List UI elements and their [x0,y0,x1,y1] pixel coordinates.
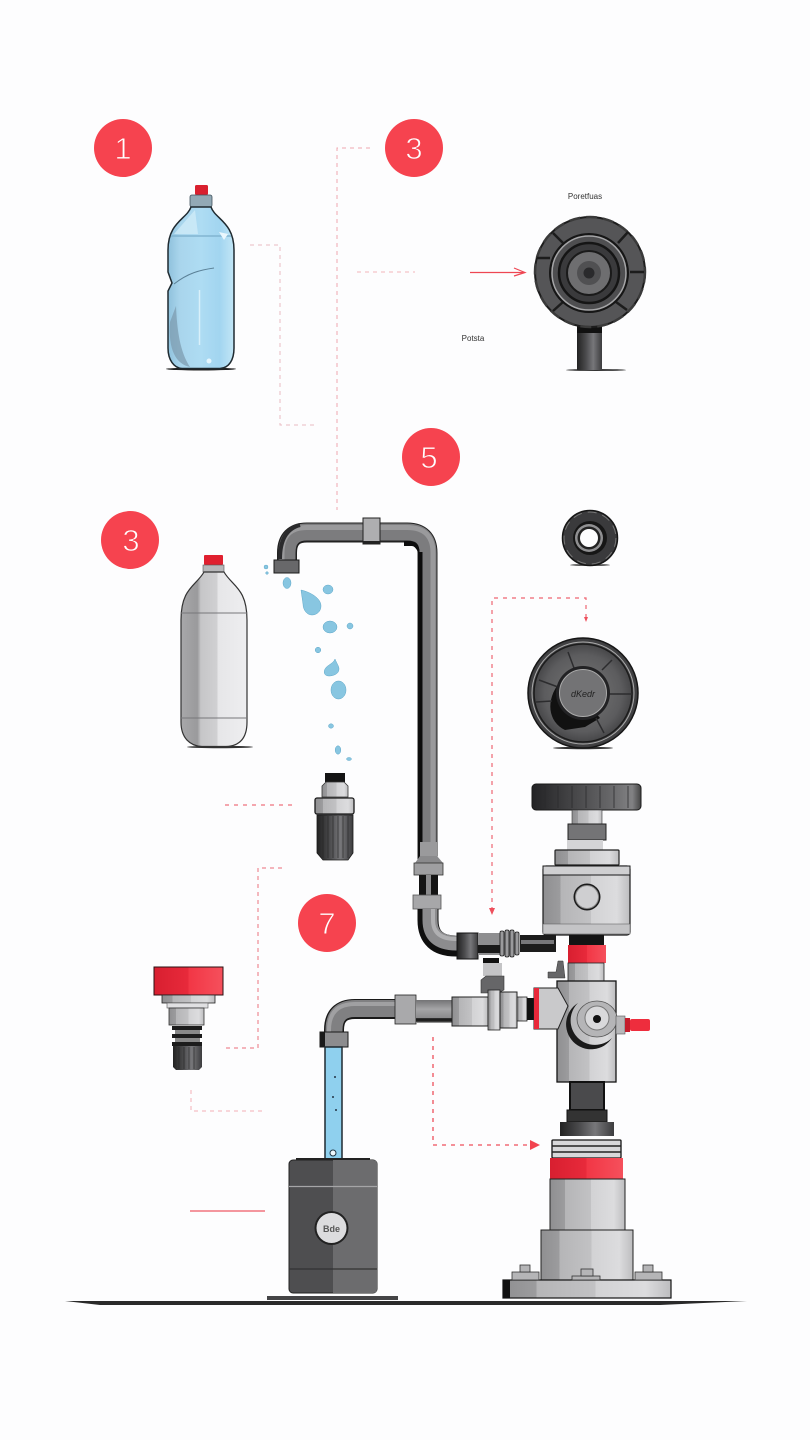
icon: silver bottle [181,555,253,748]
badge 1: 1 [114,131,132,166]
upper pipe from faucet to junction [274,518,433,862]
main valve column [503,784,671,1298]
badge 7 [298,894,356,952]
icon: filter cartridge [315,773,354,860]
water drops [264,565,353,760]
tank badge: Bde [323,1224,340,1234]
handwheel [532,784,641,810]
badge 5 [402,428,460,486]
dashed connector: badge 3 down to pipe [337,148,370,510]
red nozzle [616,1016,650,1034]
lower stem [552,1082,621,1158]
icon: small black knob [562,510,618,566]
red collar [568,945,606,963]
icon: large black disc [528,638,638,749]
label: mid small text: Potsta [462,334,485,343]
dashed arrow: to lower column [433,1037,540,1150]
icon: red capped fitting [154,967,223,1070]
base plate and bolts [503,1265,671,1298]
arrow: to top valve [357,268,525,276]
badge 3 top: 3 [405,131,423,166]
badge 5: 5 [420,440,438,475]
label: top small text: Poretfuas [568,192,602,201]
icon: blue water bottle [166,185,236,370]
lower pipe to tank [320,990,534,1047]
dashed connector: filter [225,804,295,806]
ground line [65,1301,747,1305]
badge 3 left: 3 [122,523,140,558]
dashed connector: lower left [191,1090,264,1111]
badge 3 top [385,119,443,177]
icon: storage tank [267,1158,398,1300]
gauge housing [543,866,630,935]
side tap [548,961,565,978]
badge 7: 7 [318,906,336,941]
disc label: dKedr [571,689,596,699]
water column [325,1047,342,1160]
icon: top round valve [535,217,645,371]
dashed connector: bottle to centre [250,245,315,425]
upper stem [555,810,619,865]
base columns [541,1179,633,1280]
red band [550,1158,623,1179]
badge 3 left [101,511,159,569]
lower elbow into junction [413,842,556,993]
dashed connector: red cap [225,868,282,1048]
arrow: to tank [190,1210,265,1212]
junction body [534,981,617,1082]
tank badge [314,1211,348,1245]
badge 1 [94,119,152,177]
dashed arrow: to disc and main body [489,598,588,915]
